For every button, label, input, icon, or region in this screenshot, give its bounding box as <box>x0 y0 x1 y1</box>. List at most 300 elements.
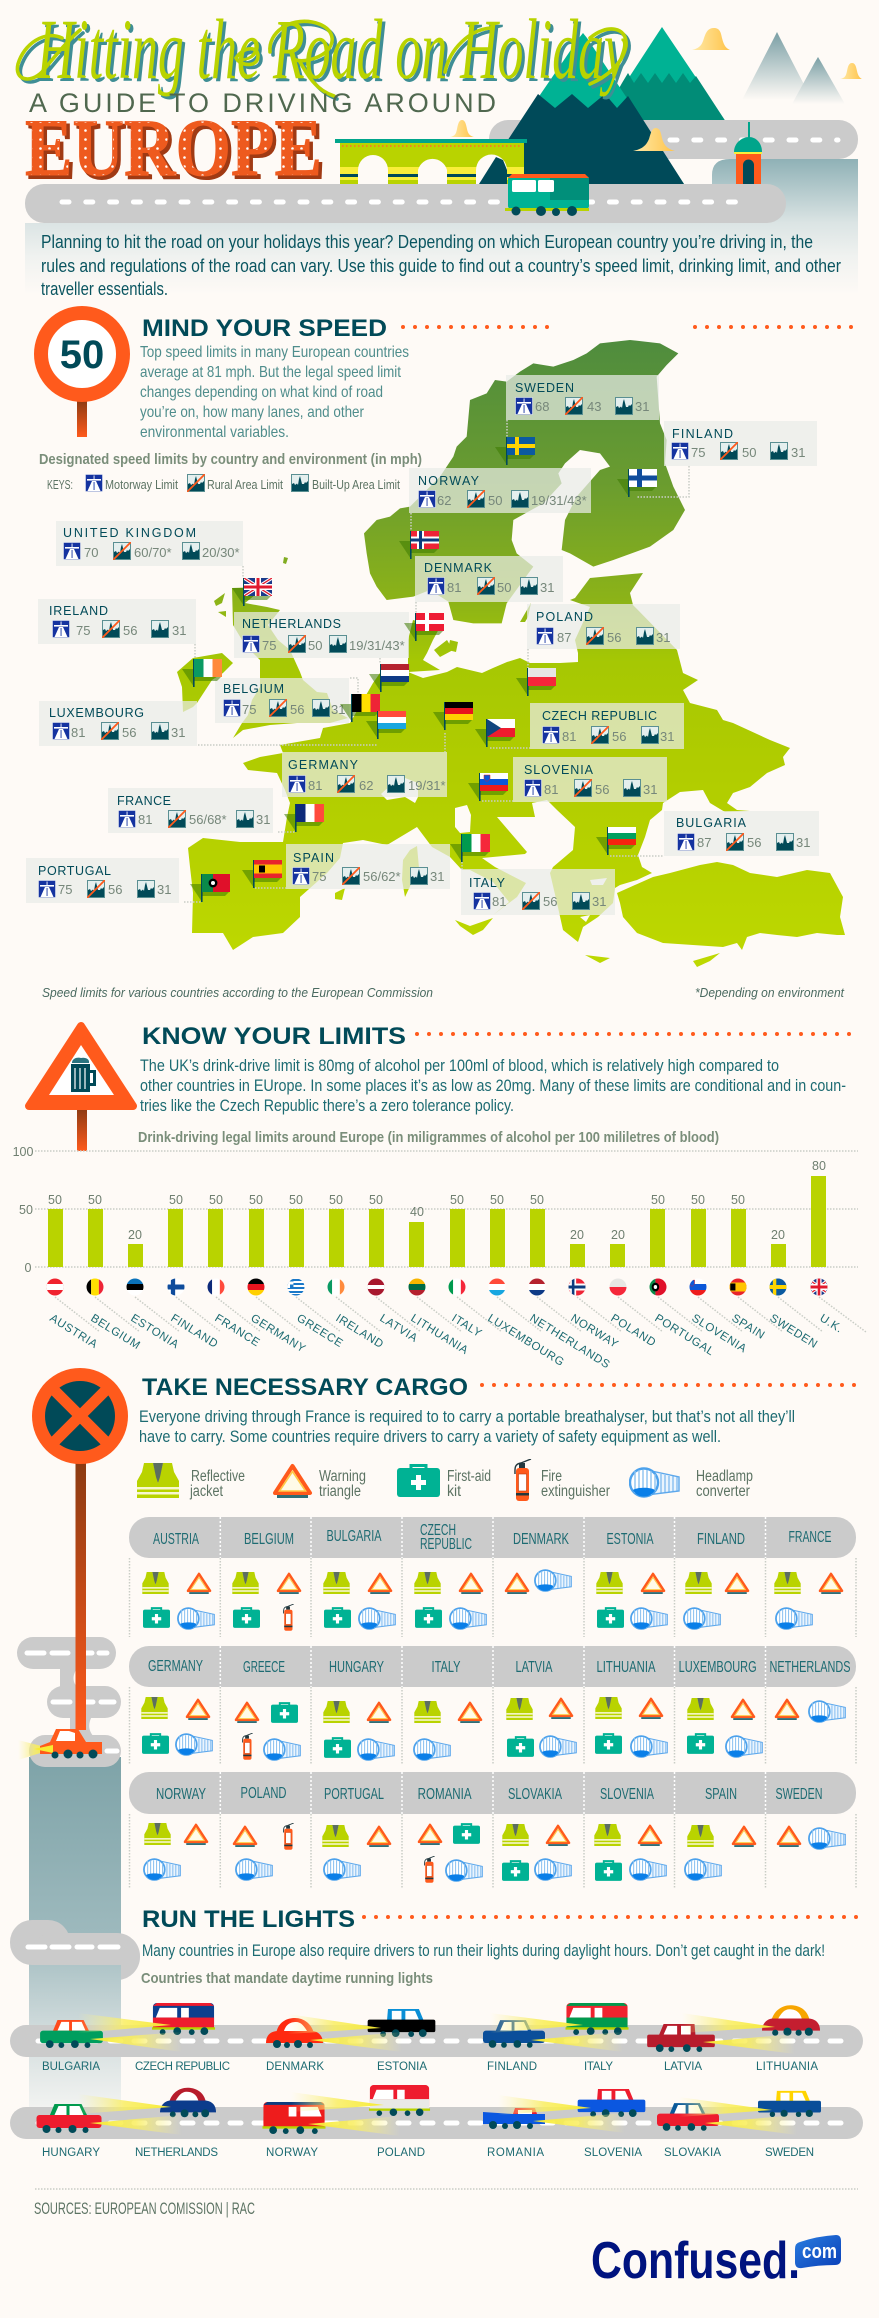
bar values: 50 <box>450 1193 464 1207</box>
cell: Bulgaria <box>323 1572 395 1629</box>
headlight beams row 2 <box>78 2092 797 2136</box>
country names: LITHUANIA <box>408 1312 470 1357</box>
car labels row 1: LATVIA <box>664 2061 702 2073</box>
flag: Netherlands <box>369 664 409 692</box>
legend: keys: Rural Area Limit <box>207 477 283 492</box>
flag: Lithuania <box>408 1278 426 1296</box>
cell: Norway <box>144 1823 207 1880</box>
cell: Netherlands <box>776 1700 845 1722</box>
flag: Sweden <box>495 437 535 465</box>
cell: Austria <box>142 1572 214 1629</box>
label: Finland: 31 <box>791 445 805 460</box>
label: Denmark: DENMARK <box>424 561 493 575</box>
body text <box>140 1057 846 1115</box>
car labels row 2: SLOVENIA <box>584 2147 642 2159</box>
icon: warning triangle with beer mug <box>29 1026 133 1151</box>
label: Italy: 31 <box>592 894 606 909</box>
flag: Luxembourg <box>366 711 406 739</box>
fog column <box>29 1757 121 2107</box>
table row 1 headers: AUSTRIA <box>153 1531 199 1548</box>
country names: GREECE <box>294 1312 345 1350</box>
table row 3 headers: SLOVAKIA <box>508 1786 562 1803</box>
country names: NETHERLANDS <box>527 1312 612 1371</box>
bar values: 50 <box>48 1193 62 1207</box>
leader lines <box>55 1297 866 1332</box>
car: Norway <box>262 2102 326 2134</box>
table row 2 headers: ITALY <box>432 1659 461 1676</box>
logo: Confused.com: com <box>802 2241 837 2263</box>
flag: Luxembourg <box>488 1278 506 1296</box>
label: Czech Republic: 31 <box>660 729 674 744</box>
chart subtitle: Countries that mandate daytime running lights <box>141 1970 433 1987</box>
label: Slovenia: SLOVENIA <box>524 763 594 777</box>
car labels row 1: ITALY <box>584 2061 613 2073</box>
label: Poland: POLAND <box>536 610 593 624</box>
cell: Belgium <box>232 1572 300 1631</box>
label: Germany: 62 <box>359 778 373 793</box>
flag: France <box>284 804 324 832</box>
panel: take necessary cargo <box>18 1368 858 1889</box>
label: Slovenia <box>513 757 667 802</box>
flag: Portugal <box>650 1278 666 1296</box>
label: Ireland: IRELAND <box>49 604 108 618</box>
car labels row 1: FINLAND <box>487 2061 537 2073</box>
label: Netherlands: NETHERLANDS <box>242 617 341 631</box>
label: Slovenia: 81 <box>544 782 558 797</box>
label: Norway <box>409 468 591 513</box>
label: Ireland: 75 <box>76 623 90 638</box>
label: Netherlands: 50 <box>308 638 322 653</box>
flag: France <box>208 1278 224 1296</box>
label: Portugal: 75 <box>58 882 72 897</box>
cell: Czech Republic <box>414 1572 486 1629</box>
label: France: 56/68* <box>189 812 227 827</box>
label: Ireland: 56 <box>123 623 137 638</box>
body text <box>140 344 409 441</box>
label: Finland <box>664 421 817 466</box>
small orange car on road <box>18 1729 102 1760</box>
country names: PORTUGAL <box>652 1312 716 1359</box>
label: Germany: 81 <box>308 778 322 793</box>
car: Latvia <box>647 2024 715 2052</box>
car: Finland <box>483 2020 545 2048</box>
country names: NORWAY <box>568 1312 620 1351</box>
van <box>505 174 589 216</box>
label: Netherlands <box>234 612 409 658</box>
panel: know your limits <box>13 1023 866 1371</box>
panel: run the lights <box>10 1906 863 2159</box>
flag: Estonia <box>126 1278 144 1296</box>
car labels row 2: SWEDEN <box>765 2147 814 2159</box>
label: Denmark: 81 <box>447 580 461 595</box>
label: Luxembourg: 81 <box>71 725 85 740</box>
axis and gridlines: 0 <box>25 1261 32 1275</box>
body text: The UK’s drink-drive limit is 80mg of alcohol per 100ml of blood, which is relatively high compared to <box>140 1057 779 1075</box>
tower <box>734 122 762 184</box>
flag: Ireland <box>182 659 222 687</box>
table row 2 headers: GERMANY <box>148 1658 203 1675</box>
car: Lithuania <box>762 2005 820 2036</box>
label: Slovenia: 31 <box>643 782 657 797</box>
title word: EUROPE: EUROPE <box>25 102 322 193</box>
table row 2 headers: HUNGARY <box>329 1659 384 1676</box>
flag: Finland <box>168 1278 184 1296</box>
cell: Slovakia <box>502 1824 571 1881</box>
label: Poland: 87 <box>557 630 571 645</box>
label: Ireland: 31 <box>172 623 186 638</box>
label: Spain: 75 <box>312 869 326 884</box>
legend: safety equipment: triangle <box>319 1483 361 1500</box>
intro text <box>41 232 841 299</box>
flag: Bulgaria <box>596 827 636 855</box>
car: Slovenia <box>578 2089 645 2117</box>
title <box>17 1 630 100</box>
label: Spain: 56/62* <box>363 869 401 884</box>
heading: MIND YOUR SPEED <box>142 315 387 342</box>
cell: Italy <box>414 1701 481 1760</box>
flag: Italy <box>448 1278 466 1296</box>
table row 2 headers <box>148 1658 850 1676</box>
label: United Kingdom: 70 <box>84 545 98 560</box>
cell: Slovenia <box>594 1824 666 1881</box>
label: Belgium: 75 <box>242 702 256 717</box>
country names: LUXEMBOURG <box>485 1312 566 1369</box>
label: Denmark: 50 <box>497 580 511 595</box>
cell: Spain <box>685 1825 755 1880</box>
bar values: 40 <box>410 1205 424 1219</box>
label: Bulgaria: 87 <box>697 835 711 850</box>
country names: FRANCE <box>212 1312 262 1350</box>
car labels row 1: BULGARIA <box>42 2061 100 2073</box>
label: France <box>108 788 273 833</box>
label: Bulgaria: 31 <box>796 835 810 850</box>
map of Europe <box>170 330 860 970</box>
label: Luxembourg: LUXEMBOURG <box>49 706 144 720</box>
label: Poland <box>527 604 680 649</box>
label: Norway: 50 <box>488 493 502 508</box>
flag: Norway <box>399 531 439 559</box>
bar values: 20 <box>771 1228 785 1242</box>
cell: Greece <box>236 1703 300 1760</box>
left road illustration <box>10 1637 140 2107</box>
label: Luxembourg <box>39 701 197 746</box>
intro text: traveller essentials. <box>41 279 168 299</box>
body text: average at 81 mph. But the legal speed limit <box>140 364 401 381</box>
icon: speed limit sign <box>41 313 123 437</box>
bar values: 20 <box>611 1228 625 1242</box>
body text: tries like the Czech Republic there’s a zero tolerance policy. <box>140 1097 514 1115</box>
car: Netherlands <box>160 2088 216 2117</box>
flag: Belgium <box>86 1278 104 1296</box>
body text: environmental variables. <box>140 424 289 441</box>
flag: Germany <box>248 1278 264 1296</box>
headlight beams row 1 <box>78 2013 795 2054</box>
road row 1 <box>10 2025 863 2057</box>
car: Poland <box>369 2085 430 2116</box>
panel: header illustration <box>25 27 862 295</box>
label: Ireland <box>38 599 196 644</box>
country names: ESTONIA <box>128 1312 181 1351</box>
label: Sweden <box>506 375 659 420</box>
legend: safety equipment <box>137 1459 753 1501</box>
label: Spain: 31 <box>430 869 444 884</box>
car labels row 2 <box>42 2147 814 2159</box>
country names: LATVIA <box>377 1312 420 1345</box>
label: Portugal: PORTUGAL <box>38 864 111 878</box>
table row 1 headers: REPUBLIC <box>420 1536 472 1553</box>
cell: Finland <box>684 1572 748 1629</box>
sources: SOURCES: EUROPEAN COMISSION | RAC <box>34 2199 255 2218</box>
bar values: 20 <box>128 1228 142 1242</box>
label: Netherlands: 19/31/43* <box>349 638 405 653</box>
table row 2 headers: GREECE <box>243 1659 285 1676</box>
flag: Slovenia <box>468 773 508 801</box>
bar values: 50 <box>530 1193 544 1207</box>
label: Norway: 62 <box>437 493 451 508</box>
label: Czech Republic: 81 <box>562 729 576 744</box>
label: France: 31 <box>256 812 270 827</box>
legend: safety equipment: extinguisher <box>541 1483 610 1500</box>
country names: GERMANY <box>248 1312 308 1356</box>
label: Finland: 75 <box>691 445 705 460</box>
cell: Poland <box>234 1823 294 1880</box>
label: Denmark: 31 <box>540 580 554 595</box>
legend: keys: Built-Up Area Limit <box>312 477 400 492</box>
viaduct <box>335 139 527 184</box>
country names: BELGIUM <box>88 1312 142 1352</box>
table row 3 headers <box>156 1785 822 1803</box>
table row 2 headers: LATVIA <box>516 1659 553 1676</box>
distant mountains <box>742 32 845 104</box>
flag: Latvia <box>368 1278 384 1296</box>
flag: Sweden <box>770 1278 786 1296</box>
label: Spain <box>286 844 450 889</box>
label: Sweden: 43 <box>587 399 601 414</box>
cell: Denmark <box>506 1570 571 1594</box>
road row 2 <box>10 2107 863 2139</box>
bar chart <box>13 1145 866 1371</box>
car labels row 2: POLAND <box>377 2147 425 2159</box>
legend: keys: Motorway Limit <box>105 477 178 492</box>
country names: FINLAND <box>168 1312 220 1351</box>
body text: have to carry. Some countries require drivers to carry a variety of safety equipment as well. <box>139 1428 721 1446</box>
cell: Sweden <box>778 1827 845 1849</box>
table row 2 headers: LUXEMBOURG <box>679 1659 757 1676</box>
label: Bulgaria: 56 <box>747 835 761 850</box>
country names: U.K. <box>817 1312 845 1336</box>
country names: AUSTRIA <box>47 1312 100 1351</box>
upper road <box>489 120 858 159</box>
label: Italy: 81 <box>492 894 506 909</box>
legend: safety equipment: Reflective <box>191 1468 245 1485</box>
table row 3 headers: SWEDEN <box>776 1786 822 1803</box>
label: Italy: 56 <box>543 894 557 909</box>
label: Finland: 50 <box>742 445 756 460</box>
flag: UK <box>810 1278 828 1296</box>
bar values: 50 <box>731 1193 745 1207</box>
label: Germany: 19/31* <box>408 778 446 793</box>
bar values: 80 <box>812 1159 826 1173</box>
flag: Ireland <box>328 1278 344 1296</box>
flag: Belgium <box>340 694 380 722</box>
table row 1 headers: FRANCE <box>788 1529 832 1546</box>
table row 2 headers: LITHUANIA <box>596 1659 656 1676</box>
cell: Germany <box>141 1697 212 1755</box>
car labels row 2: NORWAY <box>266 2147 318 2159</box>
cell: Latvia <box>506 1698 576 1757</box>
car: Czech Republic <box>152 2003 215 2035</box>
logo: Confused.com: Confused. <box>591 2232 800 2290</box>
cell: France <box>774 1572 842 1629</box>
table row 3 headers: NORWAY <box>156 1786 206 1803</box>
label: Norway: 19/31/43* <box>531 493 587 508</box>
table row 3 headers: POLAND <box>240 1785 286 1802</box>
label: Sweden: SWEDEN <box>515 381 574 395</box>
bar values: 50 <box>209 1193 223 1207</box>
icon: no stopping sign <box>32 1368 128 1730</box>
table row 1 headers: DENMARK <box>513 1531 569 1548</box>
country names <box>47 1312 845 1371</box>
map footnotes <box>42 985 845 1000</box>
label: Germany <box>282 752 447 797</box>
label: Italy <box>461 869 615 915</box>
table row 1 headers: CZECH <box>420 1522 456 1539</box>
legend: safety equipment: Warning <box>319 1468 366 1485</box>
label: Belgium: 31 <box>331 702 345 717</box>
label: United Kingdom: 20/30* <box>202 545 240 560</box>
chart subtitle: Drink-driving legal limits around Europe (in miligrammes of alcohol per 100 mililetres of blood) <box>138 1129 719 1146</box>
car labels row 1: LITHUANIA <box>756 2061 818 2073</box>
car labels row 2: NETHERLANDS <box>135 2147 218 2159</box>
country names: POLAND <box>608 1312 658 1350</box>
car: Estonia <box>368 2009 435 2037</box>
table row 1 headers: FINLAND <box>697 1531 745 1548</box>
car: Sweden <box>758 2091 821 2117</box>
label: United Kingdom <box>56 521 243 566</box>
label: Portugal <box>26 858 179 903</box>
legend: safety equipment: Headlamp <box>696 1468 753 1485</box>
map footnotes: *Depending on environment <box>695 985 845 1000</box>
car labels row 1: ESTONIA <box>377 2061 427 2073</box>
label: Belgium: BELGIUM <box>223 682 284 696</box>
legend: keys <box>47 474 400 492</box>
label: Netherlands: 75 <box>262 638 276 653</box>
label: Czech Republic <box>530 703 684 749</box>
fog behind road <box>25 159 858 295</box>
country names: SLOVENIA <box>689 1312 749 1356</box>
label: Denmark <box>415 556 563 602</box>
label: Portugal: 56 <box>108 882 122 897</box>
bar values: 50 <box>369 1193 383 1207</box>
label: Bulgaria: BULGARIA <box>676 816 747 830</box>
body text: Top speed limits in many European countries <box>140 344 409 361</box>
cell: Luxembourg <box>687 1698 762 1757</box>
bar values: 50 <box>169 1193 183 1207</box>
car labels row 1: DENMARK <box>266 2061 324 2073</box>
bar values <box>48 1159 826 1242</box>
flag: Poland <box>516 668 556 696</box>
label: Czech Republic: CZECH REPUBLIC <box>542 709 657 723</box>
bar values: 20 <box>570 1228 584 1242</box>
label: Luxembourg: 56 <box>122 725 136 740</box>
label: Belgium: 56 <box>290 702 304 717</box>
table row 3 headers: ROMANIA <box>418 1786 472 1803</box>
bar values: 50 <box>691 1193 705 1207</box>
heading: KNOW YOUR LIMITS <box>142 1023 406 1050</box>
label: Sweden: 31 <box>635 399 649 414</box>
label: Finland: FINLAND <box>672 427 733 441</box>
car: Romania <box>483 2108 545 2129</box>
table row 1 headers <box>153 1522 832 1553</box>
bar values: 50 <box>88 1193 102 1207</box>
country names: ITALY <box>449 1312 484 1340</box>
subtitle: A GUIDE TO DRIVING AROUND <box>29 88 496 118</box>
table row 1 headers: ESTONIA <box>606 1531 654 1548</box>
body text: Everyone driving through France is required to to carry a portable breathalyser, but that’s not all they’ll <box>139 1408 795 1426</box>
cell: Estonia <box>596 1572 667 1629</box>
country names: SWEDEN <box>767 1312 820 1351</box>
table row 1 headers: BELGIUM <box>244 1531 294 1548</box>
bar values: 50 <box>289 1193 303 1207</box>
body text: changes depending on what kind of road <box>140 384 383 401</box>
body text <box>139 1408 795 1446</box>
lower road <box>25 184 786 223</box>
label: France: FRANCE <box>117 794 171 808</box>
flag: Germany <box>433 702 473 730</box>
back mountain <box>600 27 726 122</box>
body text: you’re on, how many lanes, and other <box>140 404 365 421</box>
label: Spain: SPAIN <box>293 851 334 865</box>
table row 3 headers: SLOVENIA <box>600 1786 654 1803</box>
country names: IRELAND <box>333 1312 386 1351</box>
connector lines <box>184 420 689 902</box>
label: Bulgaria <box>664 811 819 856</box>
label: United Kingdom: 60/70* <box>134 545 172 560</box>
axis and gridlines: 100 <box>13 1145 33 1159</box>
bar values: 50 <box>651 1193 665 1207</box>
flag: Italy <box>450 834 490 862</box>
axis and gridlines: 50 <box>19 1203 33 1217</box>
winding road <box>10 1637 140 1985</box>
car: Bulgaria <box>40 2020 103 2048</box>
icon: speed limit sign: 50 <box>60 333 104 377</box>
car labels row 2: HUNGARY <box>42 2147 100 2159</box>
car labels row 2: SLOVAKIA <box>664 2147 721 2159</box>
legend: safety equipment: jacket <box>189 1483 224 1500</box>
flag: Czech Republic <box>475 719 515 747</box>
legend: safety equipment: converter <box>696 1483 750 1500</box>
label: Slovenia: 56 <box>595 782 609 797</box>
car labels row 1 <box>42 2061 818 2073</box>
bar values: 50 <box>249 1193 263 1207</box>
cell: Lithuania <box>595 1697 667 1757</box>
legend: safety equipment: kit <box>447 1483 462 1500</box>
label: Sweden: 68 <box>535 399 549 414</box>
flag: Spain <box>730 1278 746 1296</box>
title word: EUROPE: EUROPE <box>28 105 325 196</box>
chart subtitle: Designated speed limits by country and environment (in mph) <box>39 451 422 468</box>
table row 1 headers: BULGARIA <box>326 1528 382 1545</box>
legend: safety equipment: First-aid <box>447 1468 491 1485</box>
bars <box>48 1176 826 1267</box>
flag: Denmark <box>404 613 444 641</box>
flag: Greece <box>288 1278 304 1296</box>
label: Poland: 31 <box>656 630 670 645</box>
car labels row 2: ROMANIA <box>487 2147 544 2159</box>
label: Germany: GERMANY <box>288 758 359 772</box>
car: Denmark <box>266 2018 323 2048</box>
flag: Poland <box>610 1278 626 1296</box>
